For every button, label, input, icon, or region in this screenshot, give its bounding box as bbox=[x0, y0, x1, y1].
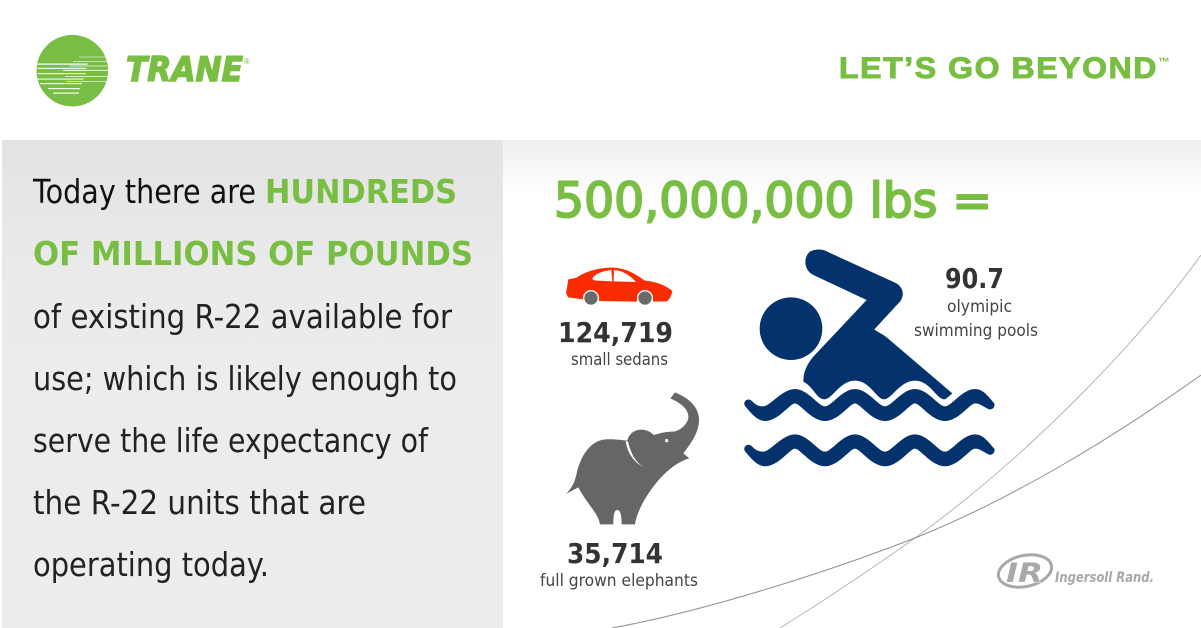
heading: 500,000,000 lbs: 500,000,000 lbs = bbox=[554, 173, 992, 229]
tagline: ™ bbox=[1158, 55, 1170, 69]
Ingersoll Rand logo bbox=[995, 550, 1154, 592]
sedans stat bbox=[558, 316, 673, 369]
text block: R-22 statement: Today there are bbox=[32, 172, 256, 211]
icon: car bbox=[566, 268, 672, 306]
pools stat bbox=[914, 262, 1038, 340]
text block: R-22 statement: use; which is likely enough to bbox=[33, 359, 457, 398]
icon: Trane circle bbox=[37, 35, 108, 107]
elephants stat: full grown elephants bbox=[540, 571, 698, 590]
elephants stat: 35,714 bbox=[567, 537, 663, 570]
pools stat: olymipic bbox=[947, 297, 1012, 316]
right panel background fade bbox=[503, 140, 1201, 196]
text block: R-22 statement: of existing R-22 available for bbox=[33, 297, 452, 336]
text block: R-22 statement: serve the life expectancy of bbox=[33, 421, 429, 460]
icon: elephant bbox=[566, 392, 699, 524]
icon: swimmer bbox=[744, 250, 995, 466]
Ingersoll Rand logo: Ingersoll Rand. bbox=[1055, 570, 1154, 586]
sedans stat: small sedans bbox=[571, 350, 668, 369]
pools stat: 90.7 bbox=[945, 262, 1004, 295]
elephants stat bbox=[540, 537, 698, 590]
panel: left text panel bbox=[2, 140, 503, 628]
text block: R-22 statement: the R-22 units that are bbox=[33, 483, 366, 522]
pools stat: swimming pools bbox=[914, 321, 1038, 340]
Ingersoll Rand logo: IR bbox=[1006, 558, 1043, 589]
text block: R-22 statement: HUNDREDS bbox=[265, 172, 457, 211]
Trane logo bbox=[37, 35, 250, 107]
sedans stat: 124,719 bbox=[558, 316, 673, 349]
text block: R-22 statement: operating today. bbox=[33, 545, 269, 584]
Trane wordmark: TRANE bbox=[126, 50, 243, 90]
tagline: LET’S GO BEYOND bbox=[839, 52, 1158, 85]
registered mark: ® bbox=[244, 57, 250, 66]
text block: R-22 statement bbox=[32, 172, 473, 584]
text block: R-22 statement: OF MILLIONS OF POUNDS bbox=[33, 234, 473, 273]
